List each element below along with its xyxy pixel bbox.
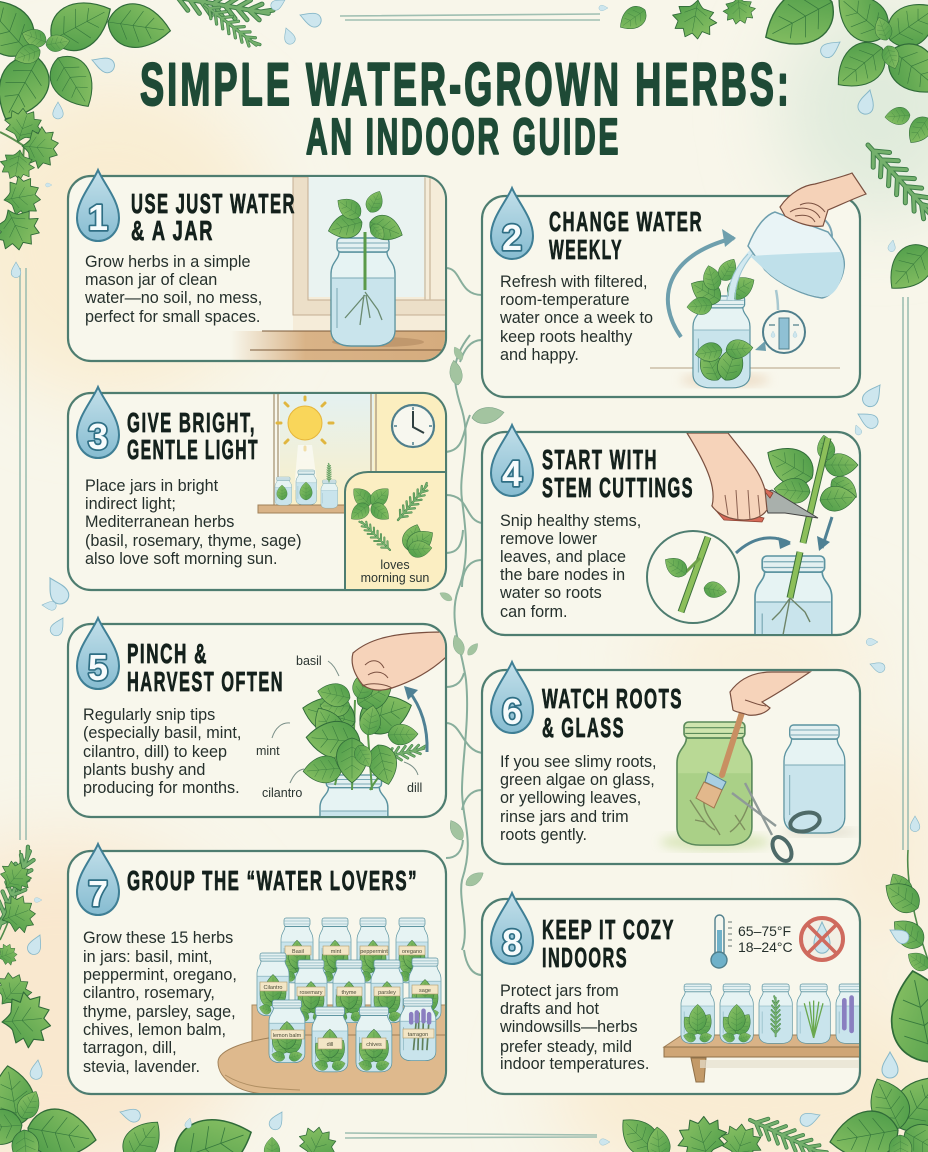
- body 6: roots gently.: [500, 826, 587, 844]
- title: [140, 51, 792, 165]
- body 2: and happy.: [500, 346, 579, 364]
- body 8: prefer steady, mild: [500, 1038, 632, 1056]
- step number drop 3: 3: [88, 416, 108, 457]
- icon: no hot drafts sign: [801, 918, 843, 960]
- body 2: water once a week to: [499, 309, 653, 327]
- step number drop 7: 7: [88, 873, 108, 914]
- body 4: remove lower: [500, 530, 598, 548]
- body 4: water so roots: [499, 584, 602, 602]
- heading 3: GENTLE LIGHT: [127, 434, 259, 465]
- herb name labels: basil: [296, 654, 322, 668]
- jars: back row: [279, 918, 430, 983]
- heading 4: STEM CUTTINGS: [542, 472, 694, 503]
- body 8: Protect jars from: [500, 982, 619, 1000]
- body 8: windowsills—herbs: [499, 1018, 638, 1036]
- body 7: peppermint, oregano,: [83, 966, 237, 984]
- central vine connecting steps: [438, 268, 505, 975]
- herb name labels: cilantro: [262, 786, 302, 800]
- corner foliage: top right: [614, 0, 928, 301]
- corner foliage: top left: [0, 0, 275, 257]
- heading 6: & GLASS: [542, 712, 625, 743]
- step number drop 4: 4: [502, 453, 522, 494]
- body 4: can form.: [500, 603, 567, 621]
- step number drop 2: [491, 188, 533, 259]
- body 6: or yellowing leaves,: [500, 789, 641, 807]
- body 7: chives, lemon balm,: [83, 1021, 226, 1039]
- heading 5: [127, 638, 284, 697]
- icon: pruning shears: [712, 486, 818, 522]
- body 5: [83, 706, 241, 797]
- temperature range: [738, 923, 793, 955]
- heading 8: INDOORS: [542, 942, 628, 973]
- step number drop 6: [491, 662, 533, 733]
- title: AN INDOOR GUIDE: [306, 108, 621, 165]
- inset: loves morning sun: loves: [380, 558, 410, 572]
- jars: middle row: Cilantro: [264, 985, 282, 991]
- jars: front row: dill: [327, 1042, 333, 1048]
- illustration: sunny window with jars: [258, 394, 446, 590]
- jars: middle row: [255, 953, 443, 1023]
- heading 8: [542, 914, 675, 973]
- jars: middle row: parsley: [378, 990, 396, 996]
- heading 4: [542, 444, 694, 503]
- icon: scissors: [732, 783, 822, 864]
- body 6: rinse jars and trim: [500, 808, 629, 826]
- icon: hand gripping pitcher: [780, 173, 866, 226]
- body 3: Mediterranean herbs: [85, 513, 234, 531]
- body 6: [500, 753, 657, 844]
- jars: back row: Basil: [292, 949, 304, 955]
- icon: hand holding shears: [687, 433, 767, 520]
- body 3: (basil, rosemary, thyme, sage): [85, 532, 302, 550]
- body 3: [85, 477, 302, 568]
- body 1: [84, 253, 262, 326]
- jars: middle row: sage: [419, 988, 431, 994]
- body 5: (especially basil, mint,: [83, 724, 241, 742]
- corner foliage: bottom right: [612, 850, 928, 1152]
- body 3: indirect light;: [85, 495, 176, 513]
- heading 1: USE JUST WATER: [131, 188, 296, 219]
- icon: hand holding brush: [730, 672, 810, 715]
- jars: middle row: thyme: [342, 990, 356, 996]
- step number drop 5: 5: [88, 647, 108, 688]
- body 4: [499, 512, 641, 621]
- step number drop 2: 2: [502, 217, 522, 258]
- body 4: Snip healthy stems,: [500, 512, 641, 530]
- body 7: Grow these 15 herbs: [83, 929, 233, 947]
- body 1: water—no soil, no mess,: [84, 289, 262, 307]
- body 1: perfect for small spaces.: [85, 308, 260, 326]
- body 6: If you see slimy roots,: [500, 753, 657, 771]
- step number drop 1: 1: [88, 197, 108, 238]
- body 5: producing for months.: [83, 779, 240, 797]
- body 6: green algae on glass,: [500, 771, 655, 789]
- body 7: tarragon, dill,: [83, 1039, 177, 1057]
- panel 1: use just water and a jar: [68, 170, 446, 361]
- temperature range: 65–75°F: [738, 923, 791, 939]
- heading 3: GIVE BRIGHT,: [127, 407, 256, 438]
- heading 5: PINCH &: [127, 638, 208, 669]
- body 7: stevia, lavender.: [83, 1058, 200, 1076]
- step number drop 8: [491, 893, 533, 964]
- icon: bottle brush: [695, 712, 744, 809]
- inset: cutting node detail: [647, 531, 739, 623]
- corner foliage: bottom left: [0, 844, 342, 1152]
- body 2: room-temperature: [500, 291, 630, 309]
- step number drop 4: [491, 425, 533, 496]
- illustration: snipping a stem into a jar: [646, 433, 858, 634]
- body 5: cilantro, dill) to keep: [83, 743, 227, 761]
- heading 2: CHANGE WATER: [549, 206, 703, 237]
- illustration: pouring water into jar: [650, 173, 866, 388]
- panel 8: keep it cozy indoors: [482, 893, 869, 1094]
- body 5: Regularly snip tips: [83, 706, 215, 724]
- body 5: plants bushy and: [83, 761, 205, 779]
- jars: back row: oregano: [402, 949, 422, 955]
- body 7: thyme, parsley, sage,: [83, 1003, 236, 1021]
- step number drop 6: 6: [502, 691, 522, 732]
- body 7: [83, 929, 237, 1076]
- body 3: also love soft morning sun.: [85, 550, 278, 568]
- step number drop 1: [77, 170, 119, 241]
- herb name labels: [256, 654, 422, 800]
- jars: middle row: rosemary: [300, 990, 323, 996]
- heading 6: WATCH ROOTS: [542, 683, 683, 714]
- body 8: drafts and hot: [500, 1000, 599, 1018]
- illustration: jars on wooden shelf: [664, 984, 869, 1082]
- heading 7: GROUP THE “WATER LOVERS”: [127, 865, 418, 896]
- step number drop 8: 8: [502, 922, 522, 963]
- jars: front row: lemon balm: [273, 1033, 302, 1039]
- body 1: mason jar of clean: [85, 271, 217, 289]
- herb name labels: mint: [256, 744, 280, 758]
- panel 6: watch roots and glass: [482, 662, 860, 864]
- jars: back row: peppermint: [360, 949, 388, 955]
- icon: water level gauge: [755, 290, 805, 353]
- illustration: jar on window sill: [230, 177, 446, 361]
- body 8: indoor temperatures.: [500, 1055, 649, 1073]
- icon: hand pinching basil tip: [352, 632, 446, 690]
- body 1: Grow herbs in a simple: [85, 253, 251, 271]
- step number drop 3: [77, 387, 119, 458]
- heading 3: [127, 407, 259, 465]
- jars: front row: [267, 998, 436, 1072]
- panel 3: give bright gentle light: [68, 387, 446, 590]
- body 4: the bare nodes in: [500, 566, 625, 584]
- heading 6: [542, 683, 683, 743]
- panel 5: pinch and harvest often: [66, 616, 448, 818]
- body 7: cilantro, rosemary,: [83, 984, 215, 1002]
- heading 8: KEEP IT COZY: [542, 914, 675, 945]
- body 8: [499, 982, 649, 1073]
- temperature range: 18–24°C: [738, 939, 793, 955]
- panel 7: group the water lovers: [68, 844, 446, 1094]
- panel 4: start with stem cuttings: [480, 422, 862, 636]
- heading 5: HARVEST OFTEN: [127, 666, 284, 697]
- heading 2: WEEKLY: [549, 234, 623, 265]
- illustration: basil plant being pinched: [302, 631, 445, 816]
- body 2: keep roots healthy: [500, 328, 633, 346]
- jars: back row: mint: [331, 949, 342, 955]
- inset: loves morning sun: [345, 472, 446, 590]
- herb name labels: dill: [407, 781, 422, 795]
- body 2: Refresh with filtered,: [500, 273, 648, 291]
- illustration: cleaning an algae jar: [660, 672, 858, 864]
- heading 1: [131, 188, 296, 246]
- heading 1: & A JAR: [131, 215, 214, 246]
- icon: thermometer: [711, 915, 732, 968]
- heading 2: [549, 206, 703, 265]
- inset: loves morning sun: morning sun: [361, 571, 429, 585]
- body 4: leaves, and place: [500, 548, 626, 566]
- jars: front row: chives: [366, 1042, 382, 1048]
- panel 2: change water weekly: [482, 173, 866, 397]
- body 7: in jars: basil, mint,: [83, 948, 213, 966]
- heading 4: START WITH: [542, 444, 658, 475]
- step number drop 7: [77, 844, 119, 915]
- body 2: [499, 273, 653, 364]
- step number drop 5: [77, 618, 119, 689]
- body 3: Place jars in bright: [85, 477, 219, 495]
- jars: front row: tarragon: [408, 1032, 428, 1038]
- illustration: table of labelled herb jars: [218, 918, 446, 1094]
